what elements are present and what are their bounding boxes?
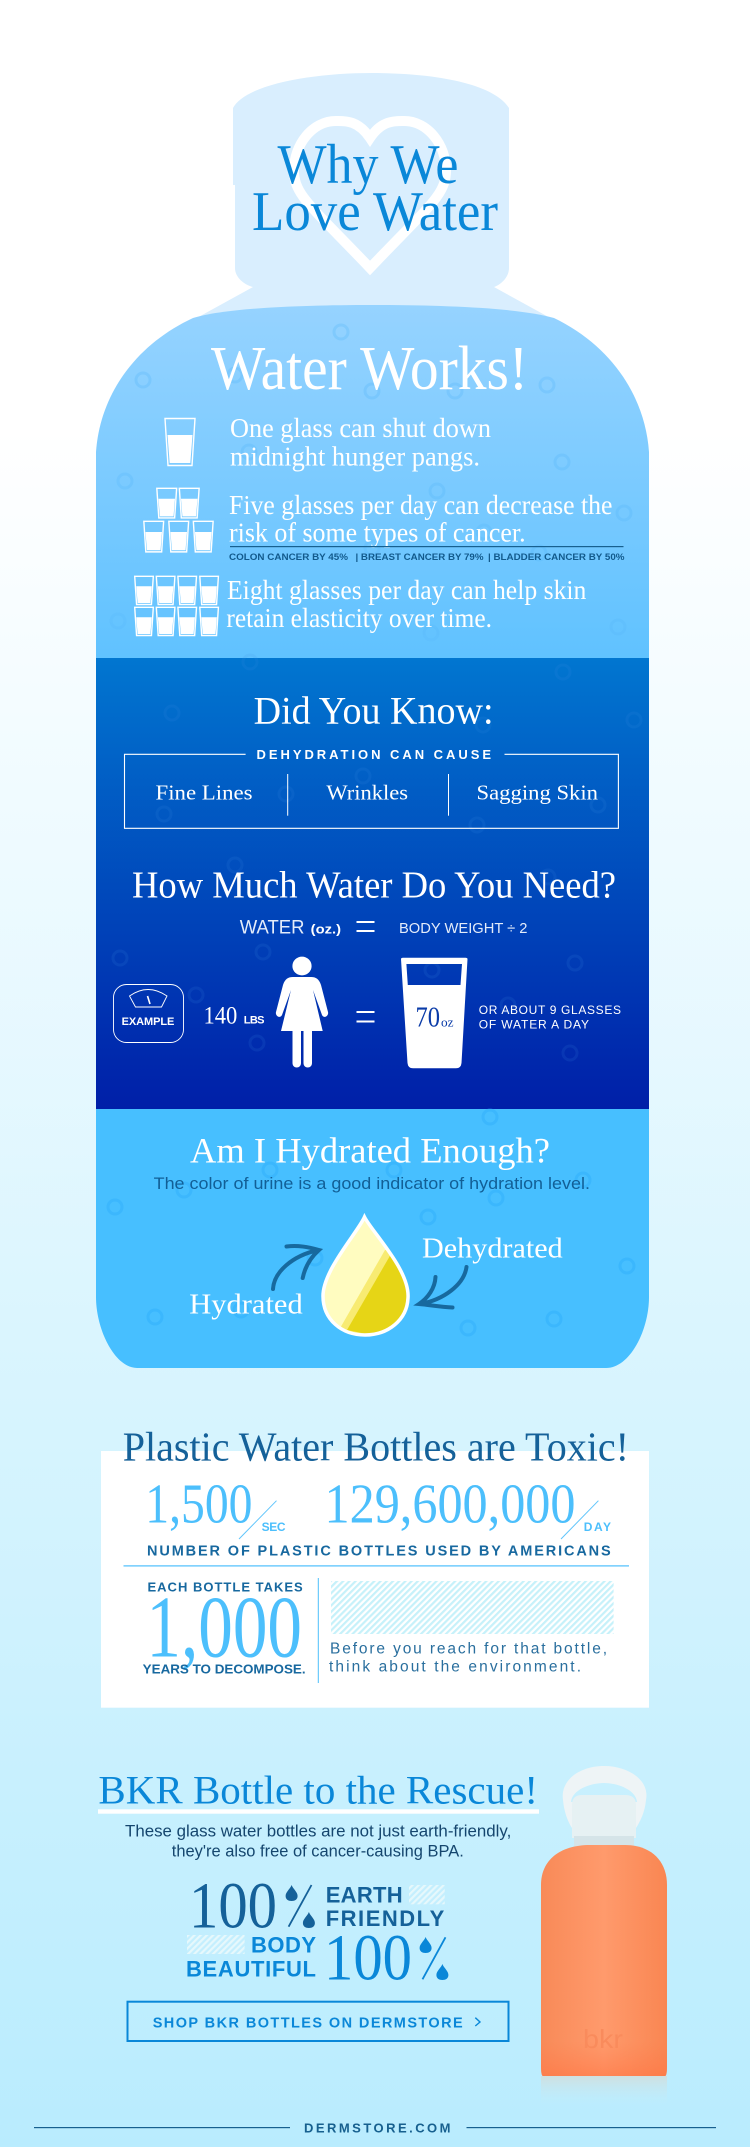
glass amount: 70 oz: 70 [416, 1003, 440, 1034]
stat: per day: DAY [584, 1520, 611, 1534]
label: hydrated: Hydrated [189, 1289, 303, 1320]
stat: 100% body beautiful: BODY [251, 1933, 316, 1958]
text: bkr description: These glass water bottles are not just earth-friendly, [125, 1823, 511, 1841]
label: dehydration can cause: DEHYDRATION CAN CAUSE [256, 747, 493, 762]
heading: did you know: Did You Know: [254, 689, 494, 732]
example badge with scale icon [114, 984, 184, 1042]
bottle body sections [90, 300, 660, 1374]
text: one glass [230, 413, 491, 472]
hatched banner [331, 1581, 614, 1634]
white card [101, 1451, 649, 1708]
text: eight glasses [226, 575, 587, 633]
button: shop bkr bottles [128, 2002, 508, 2041]
heading: water works: Water Works! [211, 335, 528, 403]
cancer statistics: COLON CANCER BY 45% [229, 552, 349, 563]
text: five glasses: Five glasses per day can decrease the [229, 490, 613, 520]
formula: WATER [240, 917, 304, 938]
divider under cancer text [230, 546, 624, 547]
stat: 100% earth friendly: EARTH [326, 1882, 403, 1907]
panel: how much water [114, 864, 621, 1068]
weight: 140 lbs: LBS [244, 1014, 264, 1026]
effects list [156, 780, 598, 804]
subtitle: urine color: The color of urine is a good indicator of hydration level. [154, 1174, 590, 1193]
note: nine glasses: OF WATER A DAY [479, 1017, 589, 1031]
cancer statistics: | BREAST CANCER BY 79% [356, 552, 484, 563]
title: Why We [278, 134, 458, 196]
cancer statistics: | BLADDER CANCER BY 50% [488, 552, 625, 563]
panel: plastic bottles [101, 1424, 649, 1708]
icon: one glass [165, 418, 195, 466]
heading: am i hydrated: Am I Hydrated Enough? [190, 1130, 550, 1170]
button: shop bkr bottles: SHOP BKR BOTTLES ON DERMSTORE [153, 2015, 463, 2031]
text: environment note: think about the environment. [329, 1659, 581, 1676]
caption: number of bottles: NUMBER OF PLASTIC BOTTLES USED BY AMERICANS [147, 1543, 611, 1559]
formula: (oz.) [311, 922, 341, 936]
text: bkr description: they're also free of cancer-causing BPA. [172, 1843, 464, 1861]
panel: water works [135, 335, 625, 636]
heading: plastic bottles: Plastic Water Bottles are Toxic! [123, 1424, 629, 1470]
heading: how much water: How Much Water Do You Need? [132, 864, 616, 906]
note: nine glasses: OR ABOUT 9 GLASSES [479, 1003, 621, 1017]
label: dehydrated: Dehydrated [422, 1234, 563, 1265]
stat: decompose time: 1,000 [146, 1580, 302, 1677]
formula [240, 917, 528, 938]
stat: 100% earth friendly: 100 [189, 1869, 277, 1942]
text: five glasses: risk of some types of cancer. [229, 518, 526, 548]
icon: woman [276, 957, 328, 1068]
panel: did you know [124, 689, 618, 828]
stat: 100% body beautiful [186, 1921, 448, 1994]
stat: per second: SEC [262, 1520, 286, 1534]
example badge with scale icon: EXAMPLE [122, 1016, 174, 1028]
frame around dehydration effects [124, 754, 618, 828]
effects list: Sagging Skin [476, 780, 598, 804]
effects list: Wrinkles [326, 780, 408, 804]
cancer statistics [229, 552, 625, 563]
arrow: dehydrated [419, 1267, 466, 1308]
stat: per day: 129,600,000 [324, 1474, 576, 1536]
bubbles: dark section [113, 655, 641, 1060]
text: bkr description [125, 1823, 511, 1861]
stat: decompose time: YEARS TO DECOMPOSE. [143, 1661, 306, 1676]
text: one glass: midnight hunger pangs. [230, 442, 480, 472]
stat: 100% earth friendly: FRIENDLY [326, 1906, 445, 1931]
panel: bkr bottle [98, 1766, 667, 2106]
equals sign [356, 1011, 374, 1022]
effects list: Fine Lines [156, 780, 252, 804]
note: nine glasses [479, 1003, 621, 1031]
stat: 100% earth friendly [189, 1869, 445, 1942]
text: eight glasses: Eight glasses per day can help skin [227, 575, 587, 605]
formula: BODY WEIGHT ÷ 2 [399, 920, 528, 937]
title [252, 134, 498, 243]
text: environment note [329, 1640, 607, 1676]
weight: 140 lbs: 140 [204, 1002, 237, 1029]
icon: five glasses [144, 488, 213, 552]
stat: 100% body beautiful: BEAUTIFUL [186, 1957, 316, 1982]
text: eight glasses: retain elasticity over time. [226, 603, 492, 633]
glass amount: 70 oz: oz [441, 1015, 454, 1030]
weight: 140 lbs [204, 1002, 264, 1029]
stat: 100% body beautiful: 100 [324, 1921, 412, 1994]
arrow: hydrated [273, 1246, 319, 1289]
bottle cap and shoulders [193, 73, 554, 320]
panel: am i hydrated [154, 1130, 590, 1345]
stat: per second: 1,500 [145, 1474, 252, 1536]
heading: bkr bottle: BKR Bottle to the Rescue! [98, 1767, 538, 1812]
text: environment note: Before you reach for that bottle, [330, 1640, 607, 1657]
text: five glasses [229, 490, 613, 548]
bubbles: hydration section [108, 1110, 634, 1335]
stat: decompose time: EACH BOTTLE TAKES [148, 1580, 303, 1595]
icon: heart outline [294, 121, 446, 268]
bottle logo: bkr [583, 2024, 623, 2054]
illustration: orange bkr bottle [541, 1766, 667, 2106]
icon: eight glasses [135, 576, 218, 636]
icon: large glass [401, 958, 468, 1068]
bubbles: water works [111, 325, 631, 640]
icon: two-tone drop [321, 1213, 410, 1337]
footer: dermstore: DERMSTORE.COM [304, 2120, 450, 2135]
text: one glass: One glass can shut down [230, 413, 491, 443]
title: Love Water [252, 181, 498, 243]
